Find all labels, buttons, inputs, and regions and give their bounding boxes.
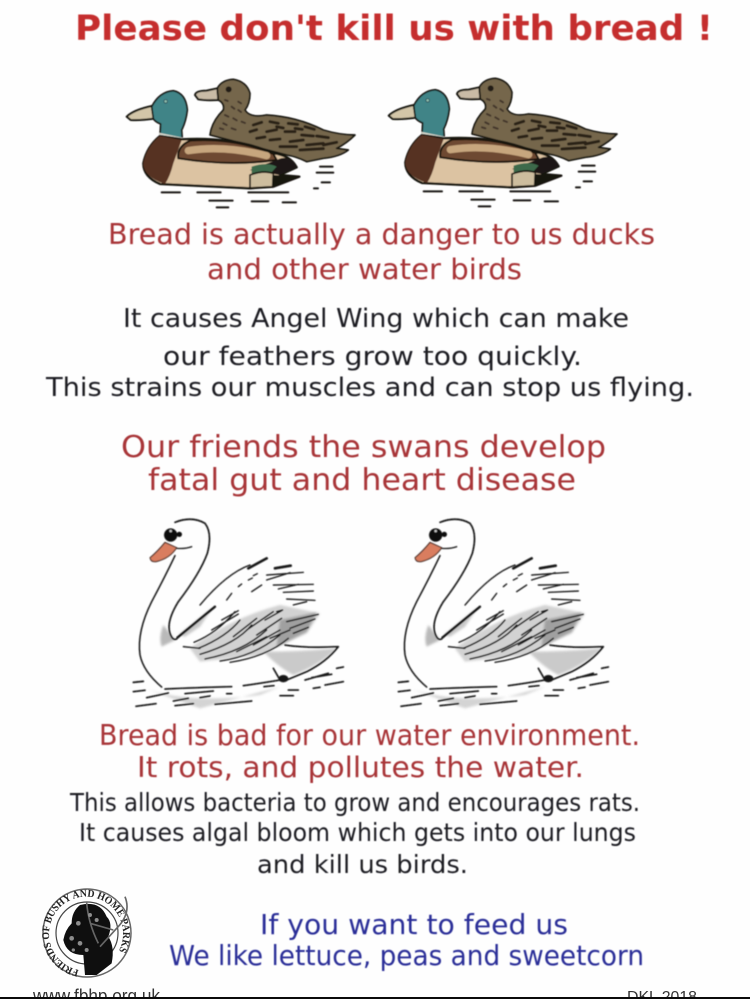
title: Please don't kill us with bread !: [75, 9, 713, 49]
text block: bacteria and algal bloom: This allows bacteria to grow and encourages rats.: [69, 788, 640, 817]
text block: bacteria and algal bloom: [69, 788, 640, 879]
heading: swans disease: Our friends the swans develop: [121, 430, 606, 465]
text block: bacteria and algal bloom: and kill us birds.: [257, 850, 468, 879]
heading: water environment: Bread is bad for our water environment.: [99, 719, 640, 752]
text block: what to feed us: If you want to feed us: [260, 909, 568, 941]
heading: bread is a danger: [108, 218, 655, 286]
text block: bacteria and algal bloom: It causes algal bloom which gets into our lungs: [79, 818, 636, 847]
illustration: left swan: [133, 519, 343, 708]
text block: what to feed us: [169, 909, 644, 972]
heading: bread is a danger: and other water birds: [207, 253, 522, 286]
text block: what to feed us: We like lettuce, peas and sweetcorn: [169, 940, 644, 972]
text block: angel wing: It causes Angel Wing which can make: [123, 304, 629, 334]
text block: angel wing: our feathers grow too quickly.: [163, 342, 582, 372]
heading: swans disease: fatal gut and heart disease: [148, 463, 576, 498]
text block: angel wing: [45, 304, 694, 403]
illustration: right pair of ducks: [389, 78, 617, 206]
heading: water environment: It rots, and pollutes the water.: [137, 751, 584, 784]
illustration: left pair of ducks: [127, 79, 355, 207]
illustration: right swan: [398, 519, 608, 708]
text block: angel wing: This strains our muscles and can stop us flying.: [45, 373, 694, 403]
heading: bread is a danger: Bread is actually a danger to us ducks: [108, 218, 655, 251]
logo: Friends of Bushy and Home Parks: FRIENDS OF BUSHY AND HOME PARKS: [42, 890, 130, 977]
heading: water environment: [99, 719, 640, 784]
heading: swans disease: [121, 430, 606, 498]
